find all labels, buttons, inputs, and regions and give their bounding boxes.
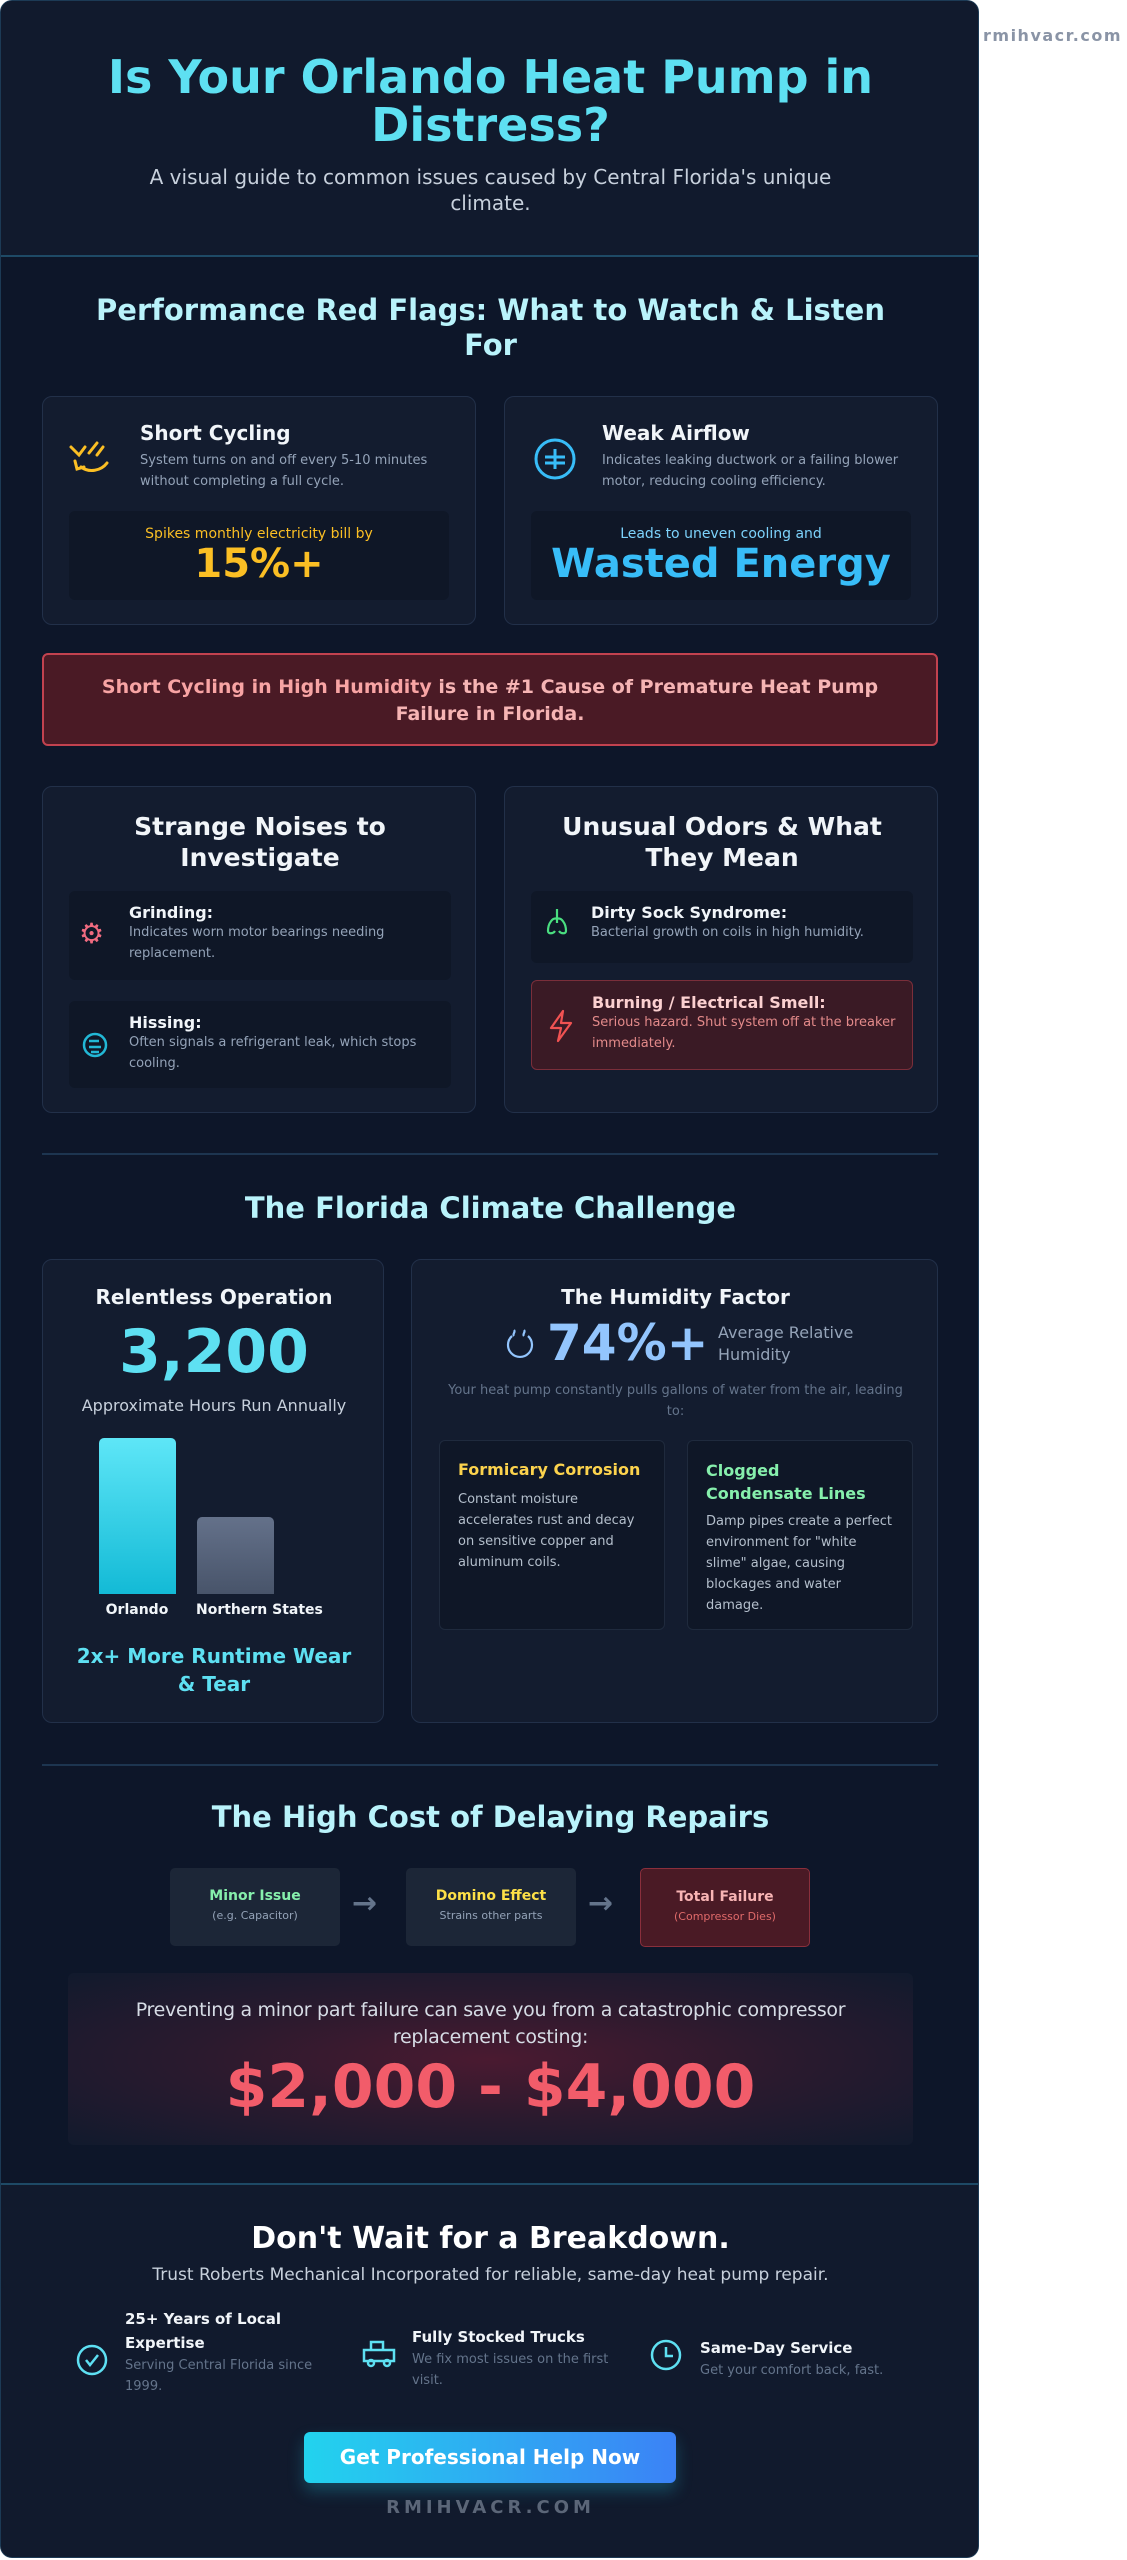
callout: cost (68, 1973, 913, 2145)
item: grinding (69, 891, 451, 980)
feature: same-day: Same-Day Service (700, 2339, 852, 2357)
item: hissing: Hissing: (129, 1013, 202, 1032)
stat: 74%: 74%+ (547, 1314, 709, 1372)
stat box: 15%+ (194, 541, 324, 587)
stat box: Wasted Energy (551, 541, 891, 587)
heading: climate: The Florida Climate Challenge (245, 1191, 736, 1225)
icon: grinding: ⚙ (79, 917, 104, 950)
icon: fan (534, 438, 576, 480)
step: total failure: Total Failure (676, 1889, 774, 1905)
stat box: Leads to uneven cooling and (620, 526, 822, 542)
icon: lungs (546, 909, 568, 934)
feature: trucks: Fully Stocked Trucks (412, 2328, 585, 2346)
arrow: → (352, 1886, 377, 1921)
bar chart (99, 1438, 323, 1618)
item: burning (531, 980, 913, 1070)
feature: trucks (362, 2328, 608, 2388)
panel: weak airflow (504, 396, 938, 625)
title: Is Your Orlando Heat Pump in (108, 50, 873, 104)
caption: 2x+ More Runtime Wear (77, 1644, 351, 1668)
feature: expertise: 25+ Years of Local (125, 2310, 281, 2328)
stat: 74% (506, 1314, 853, 1372)
heading: red flags: Performance Red Flags: What to Watch & Listen For (96, 293, 885, 362)
panel: humidity: to: (667, 1404, 684, 1419)
callout: cost: Preventing a minor part failure can save you from a catastrophic compressor (136, 1999, 845, 2021)
feature: same-day: Get your comfort back, fast. (700, 2363, 883, 2378)
caption (77, 1644, 352, 1696)
panel: weak airflow: Weak Airflow (602, 421, 750, 445)
watermark url: rmihvacr.com (983, 26, 1122, 45)
item: dirty sock (531, 891, 913, 963)
stat box: Spikes monthly electricity bill by (145, 526, 373, 542)
subtitle: A visual guide to common issues caused by Central Florida's unique climate. (150, 165, 831, 215)
title (108, 50, 873, 152)
stat box (69, 511, 449, 600)
panel: short cycling (42, 396, 476, 625)
panel: relentless operation: Approximate Hours Run Annually (82, 1396, 346, 1415)
feature: expertise: Serving Central Florida since 1999. (125, 2358, 312, 2394)
box: corrosion: Constant moisture accelerates rust and decay on sensitive copper and aluminum coils. (458, 1492, 634, 1570)
button (304, 2432, 676, 2483)
arrow: → (588, 1886, 613, 1921)
box: condensate: Condensate Lines (706, 1484, 866, 1503)
item: grinding: Indicates worn motor bearings needing replacement. (129, 925, 384, 961)
step: total failure: (Compressor Dies) (674, 1910, 776, 1923)
box: corrosion (439, 1440, 665, 1630)
box: condensate: Damp pipes create a perfect environment for "white slime" algae, causing blockages and water damage. (706, 1514, 892, 1613)
stat: 74%: Average Relative (718, 1323, 853, 1342)
callout: cost: replacement costing: (393, 2026, 588, 2048)
panel: relentless operation: Relentless Operation (95, 1285, 332, 1309)
step: minor issue: Minor Issue (209, 1888, 301, 1904)
panel: short cycling: System turns on and off every 5-10 minutes without completing a full cycle. (140, 453, 427, 489)
item: dirty sock: Bacterial growth on coils in high humidity. (591, 925, 864, 940)
item: grinding: Grinding: (129, 903, 213, 922)
bar chart: Northern States (196, 1602, 323, 1618)
panel: relentless operation (42, 1259, 384, 1723)
feature: trucks: We fix most issues on the first visit. (412, 2352, 608, 2388)
flow diagram (170, 1868, 810, 1947)
feature: expertise: Expertise (125, 2334, 205, 2352)
header (1, 1, 980, 257)
step: domino: Domino Effect (436, 1888, 546, 1904)
item: hissing (69, 1001, 451, 1088)
panel: weak airflow: Indicates leaking ductwork or a failing blower motor, reducing cooling efficiency. (602, 453, 898, 489)
stat box (531, 511, 911, 600)
feature: expertise (76, 2310, 312, 2394)
step: domino (406, 1868, 576, 1946)
box: corrosion: Formicary Corrosion (458, 1460, 640, 1479)
footer url: RMIHVACR.COM (386, 2497, 595, 2518)
title: Distress? (371, 98, 610, 152)
panel: short cycling: Short Cycling (140, 421, 291, 445)
callout: alert: Short Cycling in High Humidity is the #1 Cause of Premature Heat Pump Failure in Florida. (102, 676, 878, 725)
box: condensate (687, 1440, 913, 1630)
item: dirty sock: Dirty Sock Syndrome: (591, 903, 787, 922)
icon: cycle (69, 441, 109, 472)
step: minor issue: (e.g. Capacitor) (212, 1909, 298, 1922)
bar chart: Orlando (106, 1602, 168, 1618)
icon: hissing (82, 1032, 108, 1058)
step: minor issue (170, 1868, 340, 1946)
footer heading: Don't Wait for a Breakdown. (251, 2221, 730, 2256)
panel: humidity (411, 1259, 938, 1723)
item: hissing: Often signals a refrigerant leak, which stops cooling. (129, 1035, 416, 1071)
panel: humidity: The Humidity Factor (561, 1285, 790, 1309)
step: domino: Strains other parts (440, 1909, 542, 1922)
item: burning: Burning / Electrical Smell: (592, 993, 826, 1012)
footer: Trust Roberts Mechanical Incorporated for reliable, same-day heat pump repair. (152, 2265, 829, 2285)
stat: 3,200: 3,200 (119, 1317, 309, 1387)
box: condensate: Clogged (706, 1461, 779, 1480)
item: burning: Serious hazard. Shut system off at the breaker immediately. (592, 1015, 895, 1051)
callout: alert (42, 653, 938, 746)
step: total failure (640, 1868, 810, 1947)
heading: cost: The High Cost of Delaying Repairs (212, 1800, 769, 1834)
panel: noises (42, 786, 476, 1113)
panel: humidity: Your heat pump constantly pulls gallons of water from the air, leading (448, 1383, 903, 1398)
feature: same-day (650, 2339, 883, 2378)
button: Get Professional Help Now (340, 2445, 640, 2469)
footer (1, 2183, 980, 2559)
heading: Unusual Odors & What They Mean (562, 812, 882, 872)
icon: bolt (550, 1010, 572, 1042)
caption: & Tear (178, 1672, 250, 1696)
stat: 74%: Humidity (718, 1345, 791, 1364)
heading: Strange Noises to Investigate (134, 812, 386, 872)
callout: cost: $2,000 - $4,000 (226, 2052, 755, 2122)
panel: odors (504, 786, 938, 1113)
